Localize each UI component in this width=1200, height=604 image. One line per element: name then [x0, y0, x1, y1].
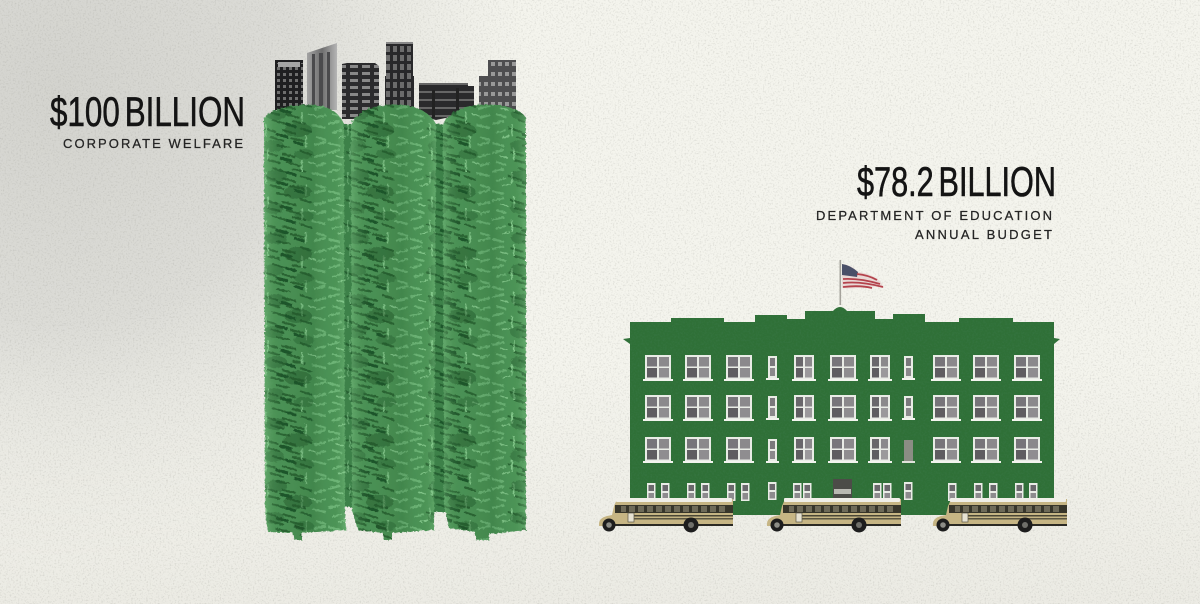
- building 5: low block: [419, 83, 474, 120]
- money column 2: [351, 104, 436, 540]
- icon: school bus 1: [599, 498, 733, 532]
- illustration: stacks of dollar bills: [264, 104, 526, 540]
- label: corporate welfare: CORPORATE WELFARE: [63, 136, 243, 151]
- windows row 4: [647, 479, 1038, 501]
- stack fillers between columns: [340, 124, 448, 512]
- building 2: glass tower: [307, 43, 337, 110]
- heading: $78.2 billion: $78.2 BILLION: [857, 158, 1056, 205]
- windows row 3: [643, 437, 1042, 463]
- heading: $100 billion: $100 BILLION: [50, 88, 245, 135]
- windows row 1: [643, 355, 1042, 381]
- illustration: skyline on top of the money stacks: [275, 42, 516, 120]
- building 1: [275, 60, 303, 110]
- building 6: [479, 60, 516, 112]
- icon: school bus 2: [767, 498, 901, 532]
- icon: school bus 3: [933, 498, 1067, 532]
- illustration: school building made of green money: [623, 307, 1060, 515]
- building 3: [342, 63, 379, 119]
- building facade: [623, 307, 1060, 515]
- icon: american flag on pole: [840, 260, 884, 305]
- money column 1: [264, 104, 346, 540]
- label: department of education annual budget: ANNUAL BUDGET: [915, 227, 1052, 242]
- money column 3: [443, 104, 526, 540]
- building 4: stepped tower: [385, 42, 414, 108]
- label: department of education annual budget: [816, 208, 1052, 242]
- label: department of education annual budget: DEPARTMENT OF EDUCATION: [816, 208, 1052, 223]
- windows row 2: [643, 395, 1042, 421]
